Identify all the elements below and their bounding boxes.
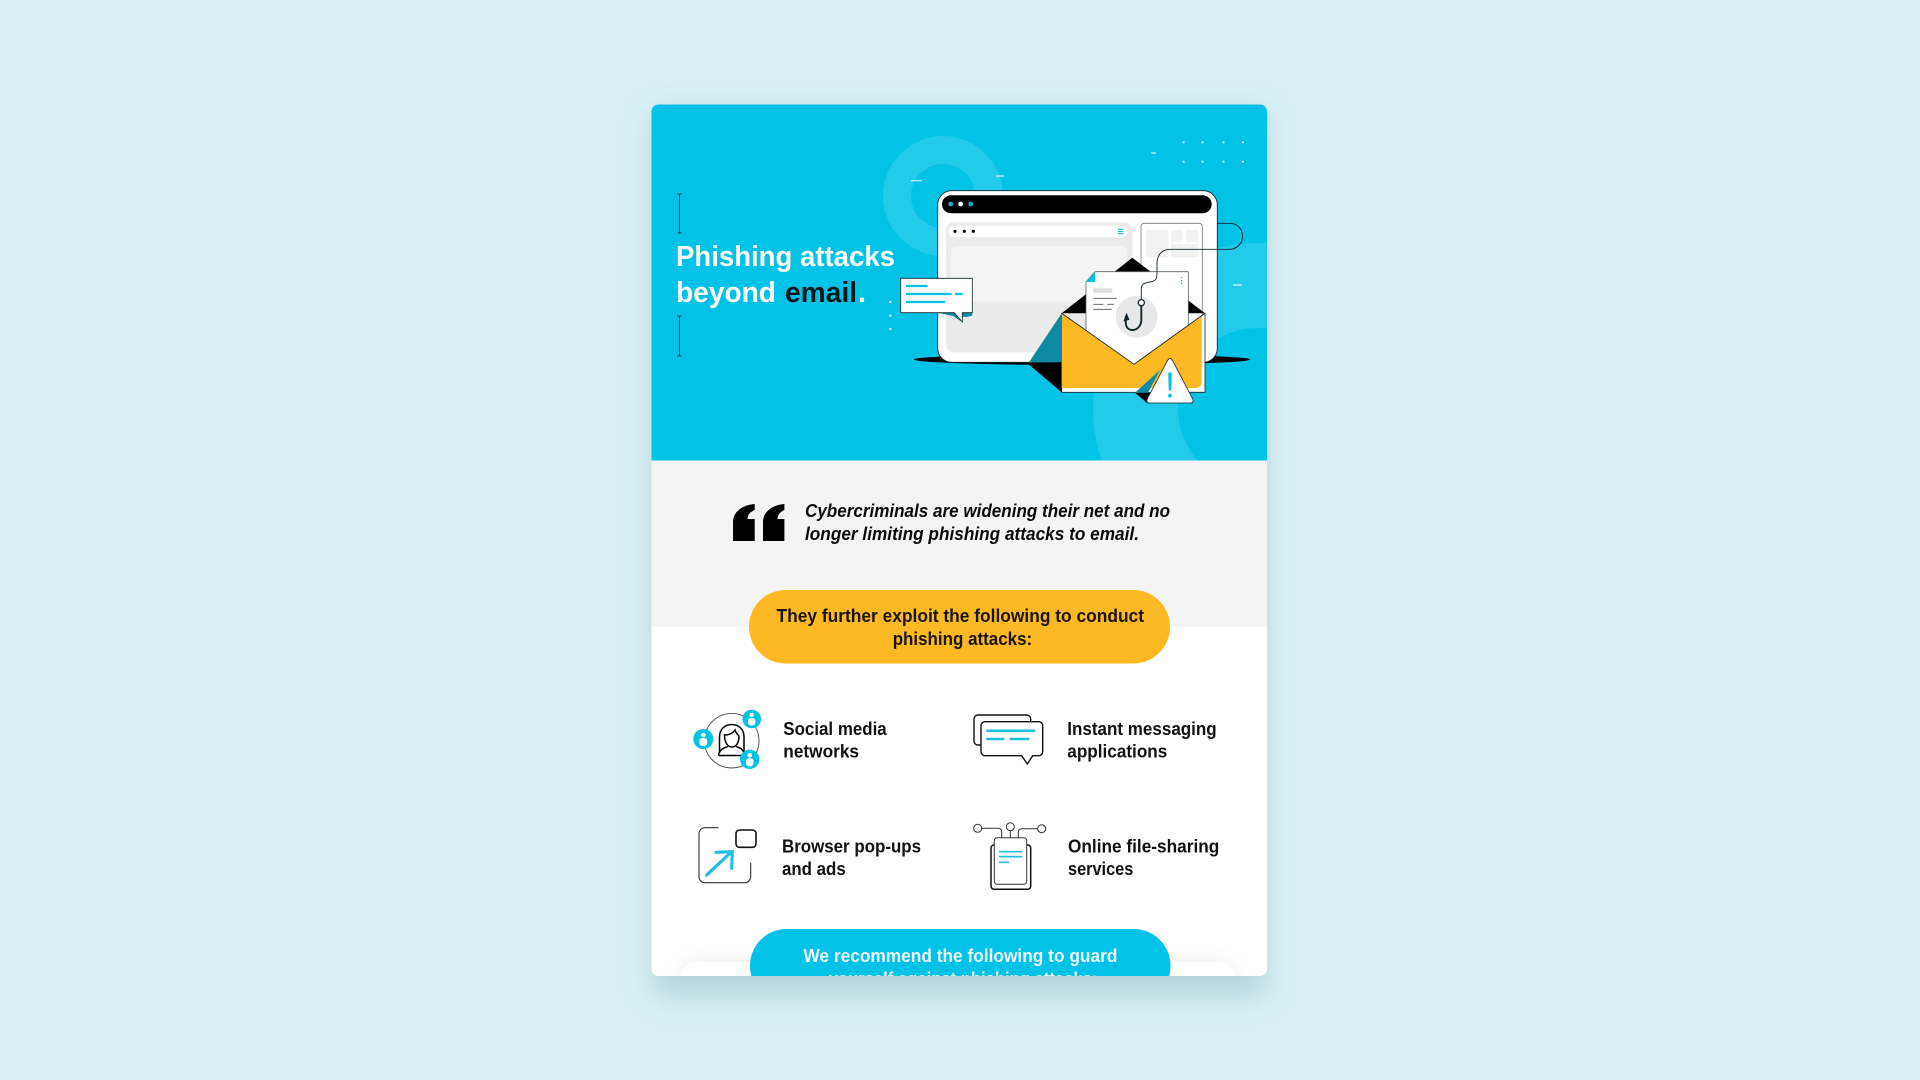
item: instant messaging applications bbox=[974, 715, 1217, 764]
item: online file-sharing services: services bbox=[1068, 858, 1133, 879]
item: browser pop-ups and ads: and ads bbox=[782, 858, 846, 879]
icon: chat bubbles bbox=[974, 715, 1043, 764]
chat bubble bbox=[901, 278, 972, 322]
envelope bbox=[1028, 258, 1205, 392]
icon: shared file bbox=[974, 823, 1046, 889]
item: social media networks: Social media bbox=[783, 718, 887, 739]
item: instant messaging applications: Instant messaging bbox=[1067, 718, 1217, 739]
phishing line and hook bbox=[1124, 223, 1243, 330]
quote text: longer limiting phishing attacks to email. bbox=[805, 523, 1139, 544]
hero panel bbox=[652, 104, 1267, 460]
callout: recommendation pill bbox=[750, 929, 1170, 976]
callout: exploit pill: phishing attacks: bbox=[893, 628, 1032, 649]
title: beyond bbox=[676, 277, 776, 309]
title: email bbox=[785, 277, 857, 309]
title: Phishing attacks bbox=[676, 241, 895, 273]
item: social media networks bbox=[693, 710, 887, 769]
item: browser pop-ups and ads: Browser pop-ups bbox=[782, 835, 921, 856]
quote text: Cybercriminals are widening their net and no bbox=[805, 500, 1170, 521]
callout: recommendation pill: We recommend the following to guard bbox=[803, 945, 1117, 966]
item: online file-sharing services bbox=[974, 823, 1219, 889]
card shadow bbox=[652, 112, 1267, 997]
item: browser pop-ups and ads bbox=[699, 828, 921, 883]
quote text bbox=[805, 500, 1170, 544]
illustration: browser window with phishing envelope bbox=[901, 191, 1250, 403]
document with fish hook bbox=[1086, 271, 1189, 364]
browser window bbox=[938, 191, 1217, 362]
item: social media networks: networks bbox=[783, 741, 859, 762]
icon: quotation marks bbox=[733, 504, 784, 541]
item: instant messaging applications: applications bbox=[1067, 741, 1167, 762]
item: online file-sharing services: Online file-sharing bbox=[1068, 835, 1219, 856]
infographic card bbox=[652, 104, 1267, 976]
icon: pop-up arrow bbox=[699, 828, 756, 883]
callout: exploit pill bbox=[749, 590, 1170, 664]
icon: social network bbox=[693, 710, 761, 769]
quote panel bbox=[652, 460, 1267, 627]
callout: exploit pill: They further exploit the following to conduct bbox=[776, 605, 1144, 626]
title bbox=[676, 241, 895, 309]
callout: recommendation pill: yourself against phishing attacks: bbox=[829, 968, 1097, 989]
warning triangle bbox=[1135, 358, 1193, 403]
recommendations panel, cropped bbox=[696, 929, 1220, 976]
title: . bbox=[858, 277, 866, 309]
